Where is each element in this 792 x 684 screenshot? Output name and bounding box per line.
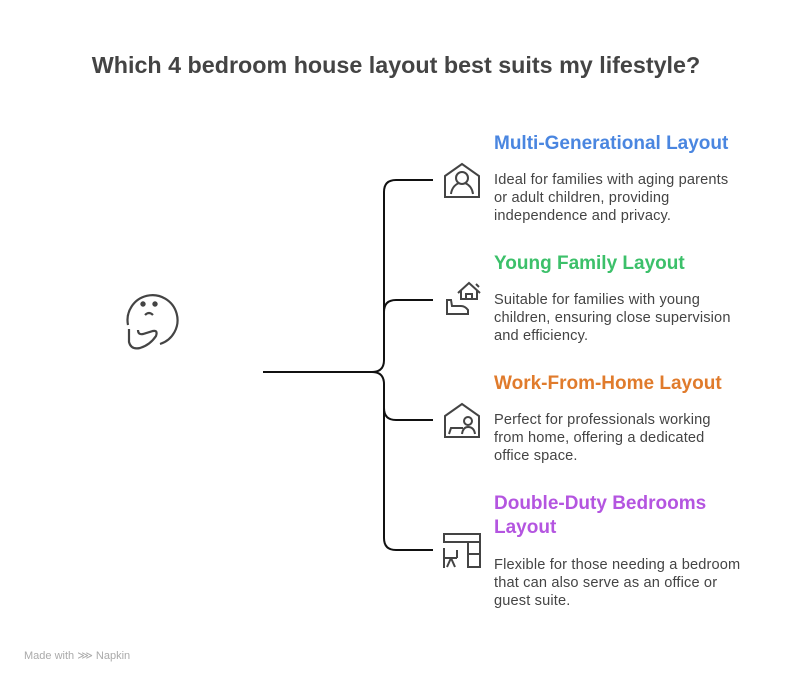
text 2: Suitable for families with young — [494, 292, 700, 308]
icon: house and bed — [446, 282, 481, 315]
heading 1: Multi-Generational Layout — [494, 133, 728, 154]
text 3: from home, offering a dedicated — [494, 430, 704, 446]
heading 4 — [494, 493, 706, 538]
heading 4: Double-Duty Bedrooms — [494, 493, 706, 514]
text 4: Flexible for those needing a bedroom — [494, 557, 740, 573]
icon: floor plan — [443, 533, 481, 568]
text 2: and efficiency. — [494, 328, 588, 344]
text 4: guest suite. — [494, 593, 570, 609]
text 1: or adult children, providing — [494, 190, 669, 206]
text 3 — [494, 412, 711, 464]
icon: thinking face — [126, 294, 179, 350]
heading 3: Work-From-Home Layout — [494, 373, 722, 394]
text 3: office space. — [494, 448, 578, 464]
heading 4: Layout — [494, 517, 556, 538]
icon: house person — [444, 162, 480, 198]
icon: house with laptop — [444, 402, 480, 438]
text 4 — [494, 557, 740, 609]
text 1: Ideal for families with aging parents — [494, 172, 728, 188]
text 1: independence and privacy. — [494, 208, 671, 224]
text 1 — [494, 172, 728, 224]
footer: Made with ⋙ Napkin — [24, 650, 130, 662]
text 4: that can also serve as an office or — [494, 575, 717, 591]
heading 2: Young Family Layout — [494, 253, 685, 274]
text 2: children, ensuring close supervision — [494, 310, 731, 326]
title: Which 4 bedroom house layout best suits my lifestyle? — [92, 52, 700, 78]
text 2 — [494, 292, 731, 344]
text 3: Perfect for professionals working — [494, 412, 711, 428]
